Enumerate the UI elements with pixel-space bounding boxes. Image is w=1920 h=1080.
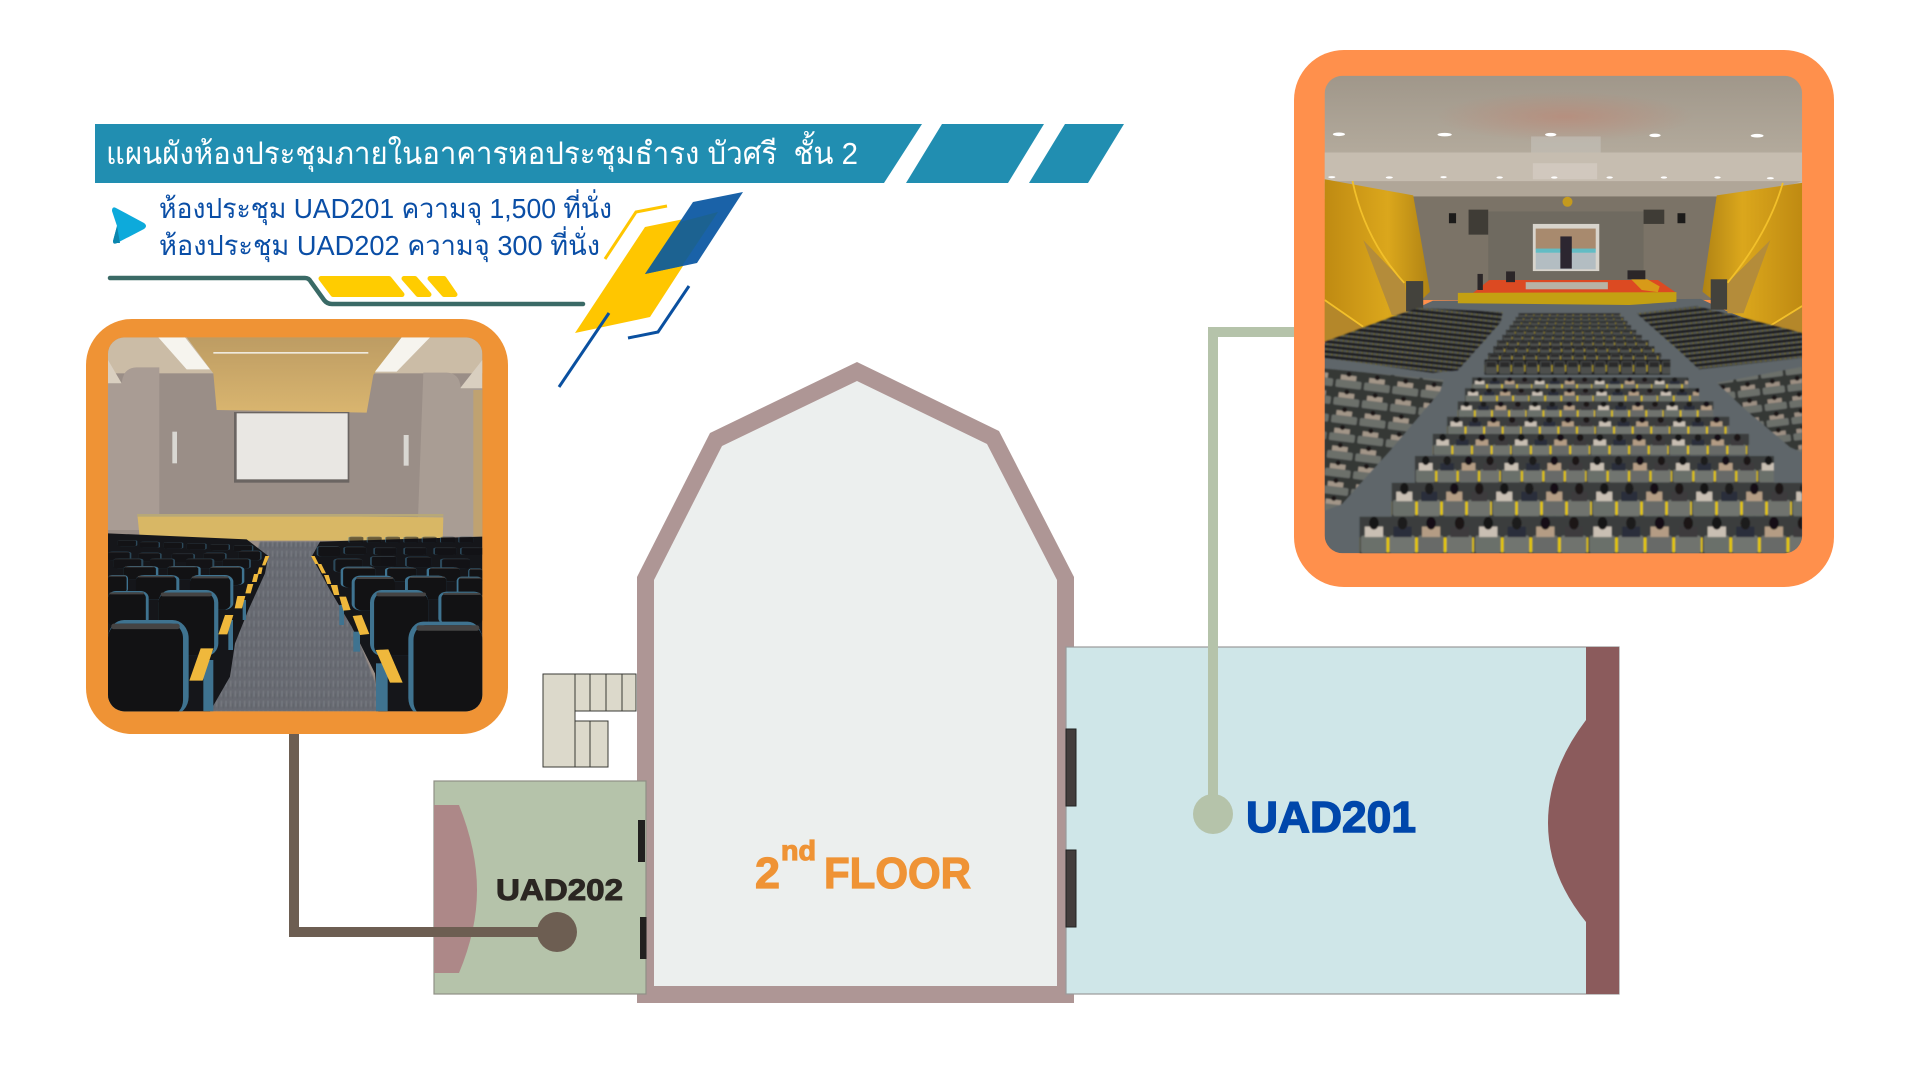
seats right: [312, 537, 482, 711]
room: UAD201: [1066, 647, 1619, 994]
doors UAD202: [638, 820, 646, 959]
staircase: [543, 674, 636, 767]
label: 2nd floor: 2: [755, 849, 780, 898]
label: 2nd floor: FLOOR: [824, 849, 971, 898]
stage UAD202: [434, 805, 477, 973]
connector: UAD201 to photo: [1213, 332, 1294, 814]
speakers: [172, 432, 177, 463]
label UAD201: UAD201: [1246, 793, 1416, 842]
far seats right: [317, 537, 483, 572]
panel: 2nd floor hall: [637, 362, 1074, 1003]
label: 2nd floor: nd: [781, 835, 816, 866]
seating blocks: [1325, 306, 1802, 554]
seats left: [108, 533, 268, 711]
near seats left: [108, 566, 244, 715]
capacity line UAD201: ห้องประชุม UAD201 ความจุ 1,500 ที่นั่ง: [159, 189, 612, 226]
photo: UAD202 room: [108, 337, 483, 716]
projection screen: [234, 412, 349, 483]
yellow armrests: [189, 556, 403, 683]
carpet aisle: [203, 542, 387, 711]
icon: blue play arrow: [112, 207, 146, 244]
marker: UAD202: [537, 912, 577, 952]
projection screen: [1533, 224, 1599, 271]
gold side walls: [1325, 179, 1430, 342]
room: UAD202: [434, 781, 646, 994]
decorative underline with yellow bars: [110, 278, 583, 304]
panel: UAD201 photo frame: [1294, 50, 1834, 587]
stage UAD201: [1548, 647, 1619, 994]
photo: UAD201 auditorium: [1325, 76, 1802, 554]
decorative parallelograms and lines: [559, 192, 743, 387]
ceiling: [108, 337, 482, 373]
stage: [1472, 280, 1676, 294]
title banner: [95, 124, 1124, 183]
back wall: [1413, 196, 1717, 300]
floor: [1325, 299, 1802, 553]
label UAD202: UAD202: [496, 874, 623, 907]
capacity text: [159, 189, 612, 263]
marker: UAD201: [1193, 794, 1233, 834]
near seats right: [341, 567, 482, 716]
far seats left: [108, 540, 262, 569]
seat side panels: [203, 600, 388, 711]
ceiling: [1325, 76, 1802, 199]
panel: UAD202 photo frame: [86, 319, 508, 734]
title text: แผนผังห้องประชุมภายในอาคารหอประชุมธำรง บัวศรี ชั้น 2: [106, 131, 858, 173]
podium: [137, 514, 443, 541]
ceiling lights: [1328, 132, 1774, 179]
capacity line UAD202: ห้องประชุม UAD202 ความจุ 300 ที่นั่ง: [159, 226, 600, 263]
wall columns: [108, 367, 159, 530]
connector: UAD202 to photo: [294, 734, 557, 932]
doors UAD201: [1066, 729, 1076, 927]
label: 2nd floor: [755, 835, 971, 898]
